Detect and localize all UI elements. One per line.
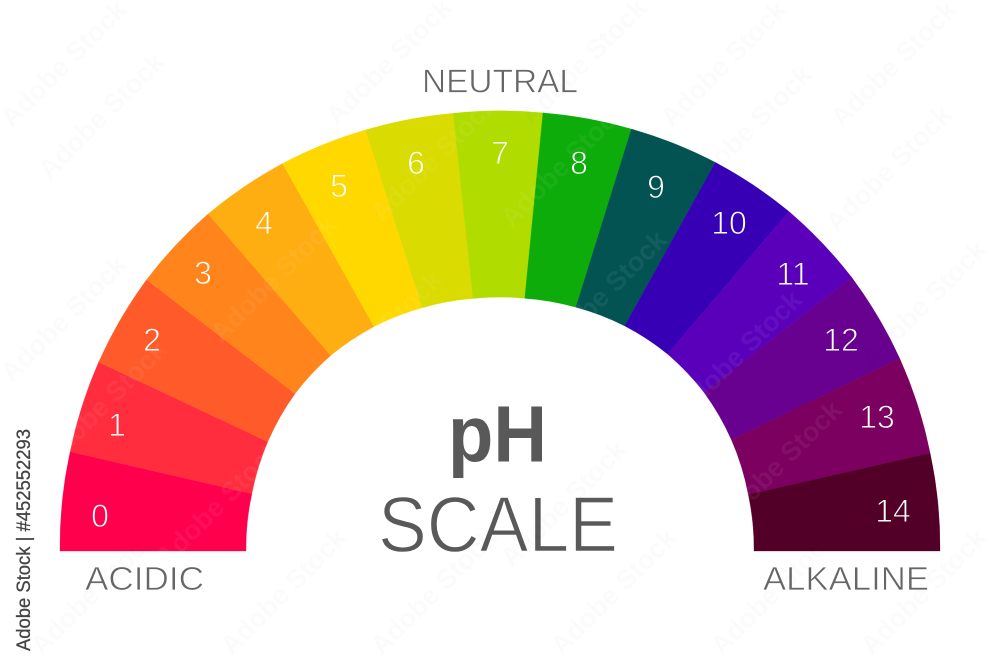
segment: pH 7: 7 (491, 135, 509, 171)
segment: pH 13: 13 (859, 399, 895, 435)
watermark: Adobe Stock (310, 264, 448, 403)
watermark: Adobe Stock (162, 86, 300, 225)
watermark: Adobe Stock (855, 234, 993, 373)
watermark: Adobe Stock (855, 522, 993, 661)
segment: pH 1: 1 (108, 407, 126, 443)
segment: pH 3: 3 (194, 255, 212, 291)
watermark: Adobe Stock (670, 284, 808, 423)
segment: pH 3 (146, 214, 331, 394)
watermark: Adobe Stock (215, 522, 353, 661)
segment: pH 12 (704, 277, 900, 440)
segment: pH 1 (70, 362, 268, 494)
segment: pH 13 (731, 359, 930, 495)
title: scale: SCALE (378, 480, 618, 569)
watermark: Adobe Stock (705, 522, 843, 661)
watermark: Adobe Stock (365, 522, 503, 661)
watermark: Adobe Stock (33, 46, 171, 185)
watermark: Adobe Stock (205, 209, 343, 348)
label: acidic: ACIDIC (85, 560, 204, 597)
watermark: Adobe Stock (495, 434, 633, 573)
segment: pH 2: 2 (143, 322, 161, 358)
segment: pH 0 (60, 452, 252, 551)
segment: pH 4: 4 (255, 205, 273, 241)
segment: pH 5 (283, 130, 422, 327)
label: neutral: NEUTRAL (422, 63, 578, 100)
watermark: Adobe Stock (365, 89, 503, 228)
title: pH: pH (448, 390, 547, 479)
segment: pH 12: 12 (823, 322, 859, 358)
watermark: Adobe Stock (710, 394, 848, 533)
segment: pH 5: 5 (330, 168, 348, 204)
segment: pH 6 (366, 113, 473, 308)
watermark: Adobe Stock (495, 94, 633, 233)
segment: pH 11: 11 (776, 256, 810, 292)
watermark: Adobe Stock (820, 99, 958, 238)
segment: pH 4 (208, 163, 374, 356)
watermark: Adobe Stock (150, 434, 288, 573)
label: alkaline: ALKALINE (763, 560, 929, 597)
segment: pH 10: 10 (711, 205, 747, 241)
watermark: Adobe Stock (25, 522, 163, 661)
segment: pH 2 (99, 280, 295, 442)
segment: pH 11 (668, 211, 852, 392)
segment: pH 9 (576, 129, 715, 326)
segment: pH 9: 9 (647, 169, 665, 205)
watermark: Adobe Stock (680, 59, 818, 198)
segment: pH 6: 6 (407, 145, 425, 181)
gauge: semicircular pH scale (60, 111, 940, 551)
watermark: Adobe Stock (545, 522, 683, 661)
segment: pH 8: 8 (570, 145, 588, 181)
segment: pH 14: 14 (875, 493, 911, 529)
segment: pH 10 (625, 162, 789, 354)
stock credit: Adobe Stock | #452552293 (14, 429, 35, 651)
segment: pH 0: 0 (91, 498, 109, 534)
segment: pH 7 (453, 111, 543, 299)
segment: pH 8 (525, 113, 631, 307)
watermark: Adobe Stock (35, 334, 173, 473)
segment: pH 14 (748, 453, 940, 551)
watermark: Adobe Stock (535, 224, 673, 363)
